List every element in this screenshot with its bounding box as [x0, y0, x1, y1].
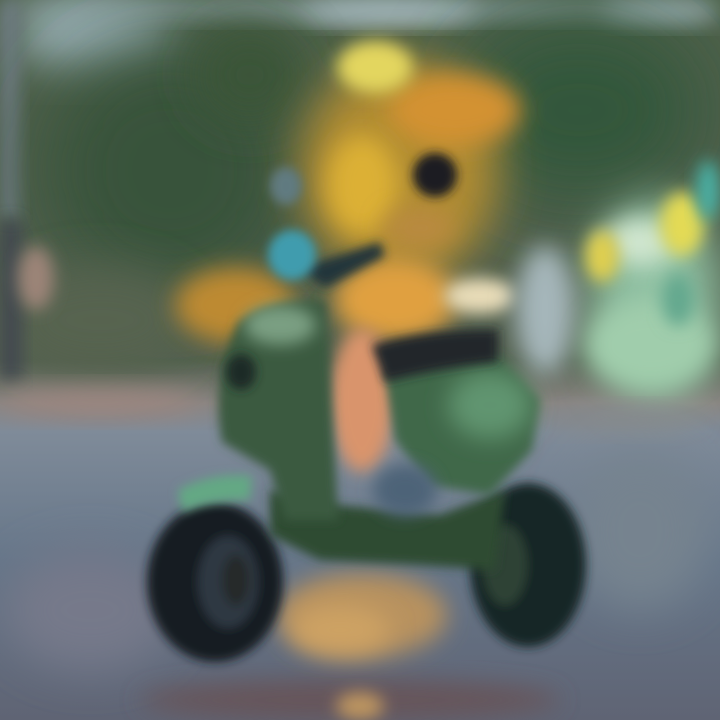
- rear wheel: [470, 483, 586, 647]
- warm street lights: [175, 41, 521, 472]
- front fender: [178, 475, 252, 512]
- handlebar: [300, 242, 385, 288]
- front shield: [218, 301, 338, 520]
- bright storefront on right: [515, 160, 720, 400]
- scooter: [147, 153, 586, 662]
- floorboard frame: [270, 490, 505, 570]
- sky and tree backdrop: [0, 0, 720, 380]
- road details: [0, 388, 710, 720]
- seat: [372, 330, 498, 382]
- rear body: [385, 352, 540, 495]
- headlight: [268, 230, 316, 280]
- mirror right: [413, 153, 457, 197]
- mirror left: [270, 167, 302, 205]
- front wheel: [147, 502, 283, 662]
